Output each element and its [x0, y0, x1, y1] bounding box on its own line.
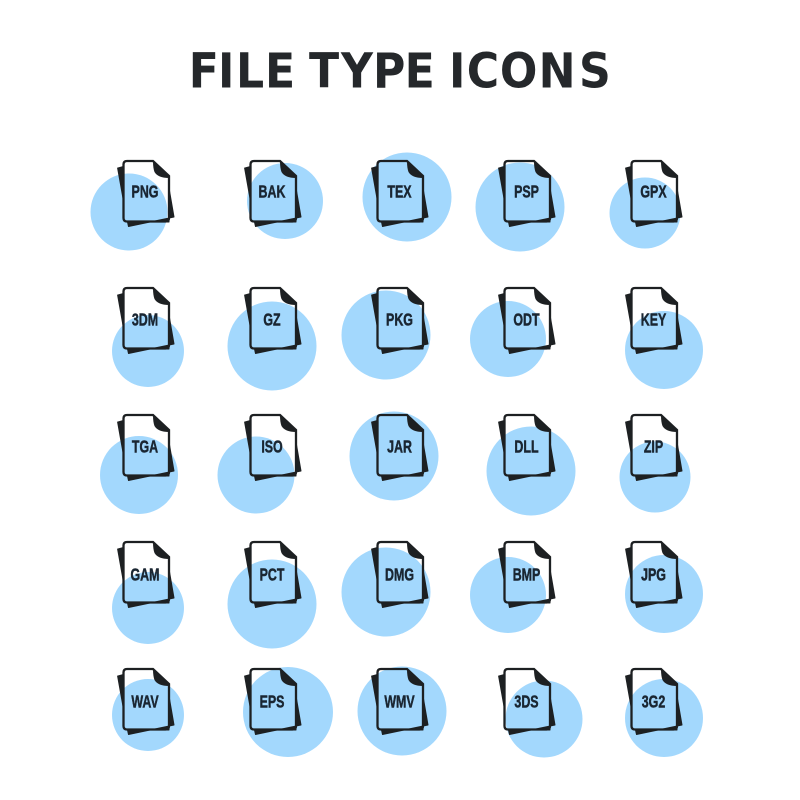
- icon: PKG file: [342, 288, 430, 380]
- icon: BAK file: [244, 161, 323, 239]
- icon: WMV file: WMV: [384, 693, 415, 712]
- icon: ZIP file: ZIP: [644, 438, 663, 457]
- icon: ZIP file: [620, 415, 690, 512]
- icon: 3G2 file: [625, 669, 703, 757]
- icon: TGA file: [100, 415, 178, 514]
- title: FILE TYPE ICONS: [189, 43, 611, 99]
- icon: TEX file: [362, 152, 452, 242]
- icon: EPS file: [243, 667, 333, 757]
- icon: 3DM file: [112, 288, 184, 387]
- icon: DMG file: [342, 542, 430, 636]
- icon: ODT file: ODT: [513, 311, 540, 330]
- icon: PKG file: PKG: [386, 311, 413, 330]
- icon: PNG file: PNG: [132, 183, 158, 202]
- icon: PNG file: [90, 161, 174, 250]
- icon: 3G2 file: 3G2: [642, 693, 665, 712]
- icon: GZ file: GZ: [263, 311, 281, 330]
- icon: 3DS file: 3DS: [514, 693, 539, 712]
- icon: DLL file: [486, 415, 576, 516]
- icon: ODT file: [470, 288, 555, 377]
- icon: GZ file: [228, 288, 316, 390]
- icon: BAK file: BAK: [259, 183, 285, 202]
- icon: WMV file: [358, 666, 446, 756]
- icon: ISO file: [218, 415, 301, 514]
- icon: TGA file: TGA: [132, 438, 158, 457]
- icon: DLL file: DLL: [514, 438, 539, 457]
- icon: JPG file: [625, 542, 703, 633]
- icon: GPX file: GPX: [640, 183, 667, 202]
- icon: PSP file: [476, 161, 564, 252]
- icon: JAR file: JAR: [387, 438, 412, 457]
- icon: PCT file: [228, 542, 316, 648]
- icon: GAM file: [112, 542, 184, 644]
- icon: KEY file: [625, 288, 703, 389]
- icon: PCT file: PCT: [260, 566, 285, 585]
- icon: KEY file: KEY: [641, 311, 666, 330]
- icon: TEX file: TEX: [387, 183, 412, 202]
- icon: JAR file: [350, 412, 438, 500]
- icon: EPS file: EPS: [260, 693, 284, 712]
- icon: 3DS file: [498, 669, 582, 758]
- icon: BMP file: BMP: [513, 566, 540, 585]
- icon: 3DM file: 3DM: [132, 311, 158, 330]
- icon: WAV file: WAV: [131, 693, 159, 712]
- icon: BMP file: [470, 542, 555, 633]
- icon: JPG file: JPG: [641, 566, 666, 585]
- icon: GPX file: [610, 161, 682, 248]
- icon: WAV file: [112, 669, 184, 751]
- icon: ISO file: ISO: [261, 438, 283, 457]
- icon: GAM file: GAM: [131, 566, 159, 585]
- icon: DMG file: DMG: [385, 566, 414, 585]
- icon: PSP file: PSP: [514, 183, 539, 202]
